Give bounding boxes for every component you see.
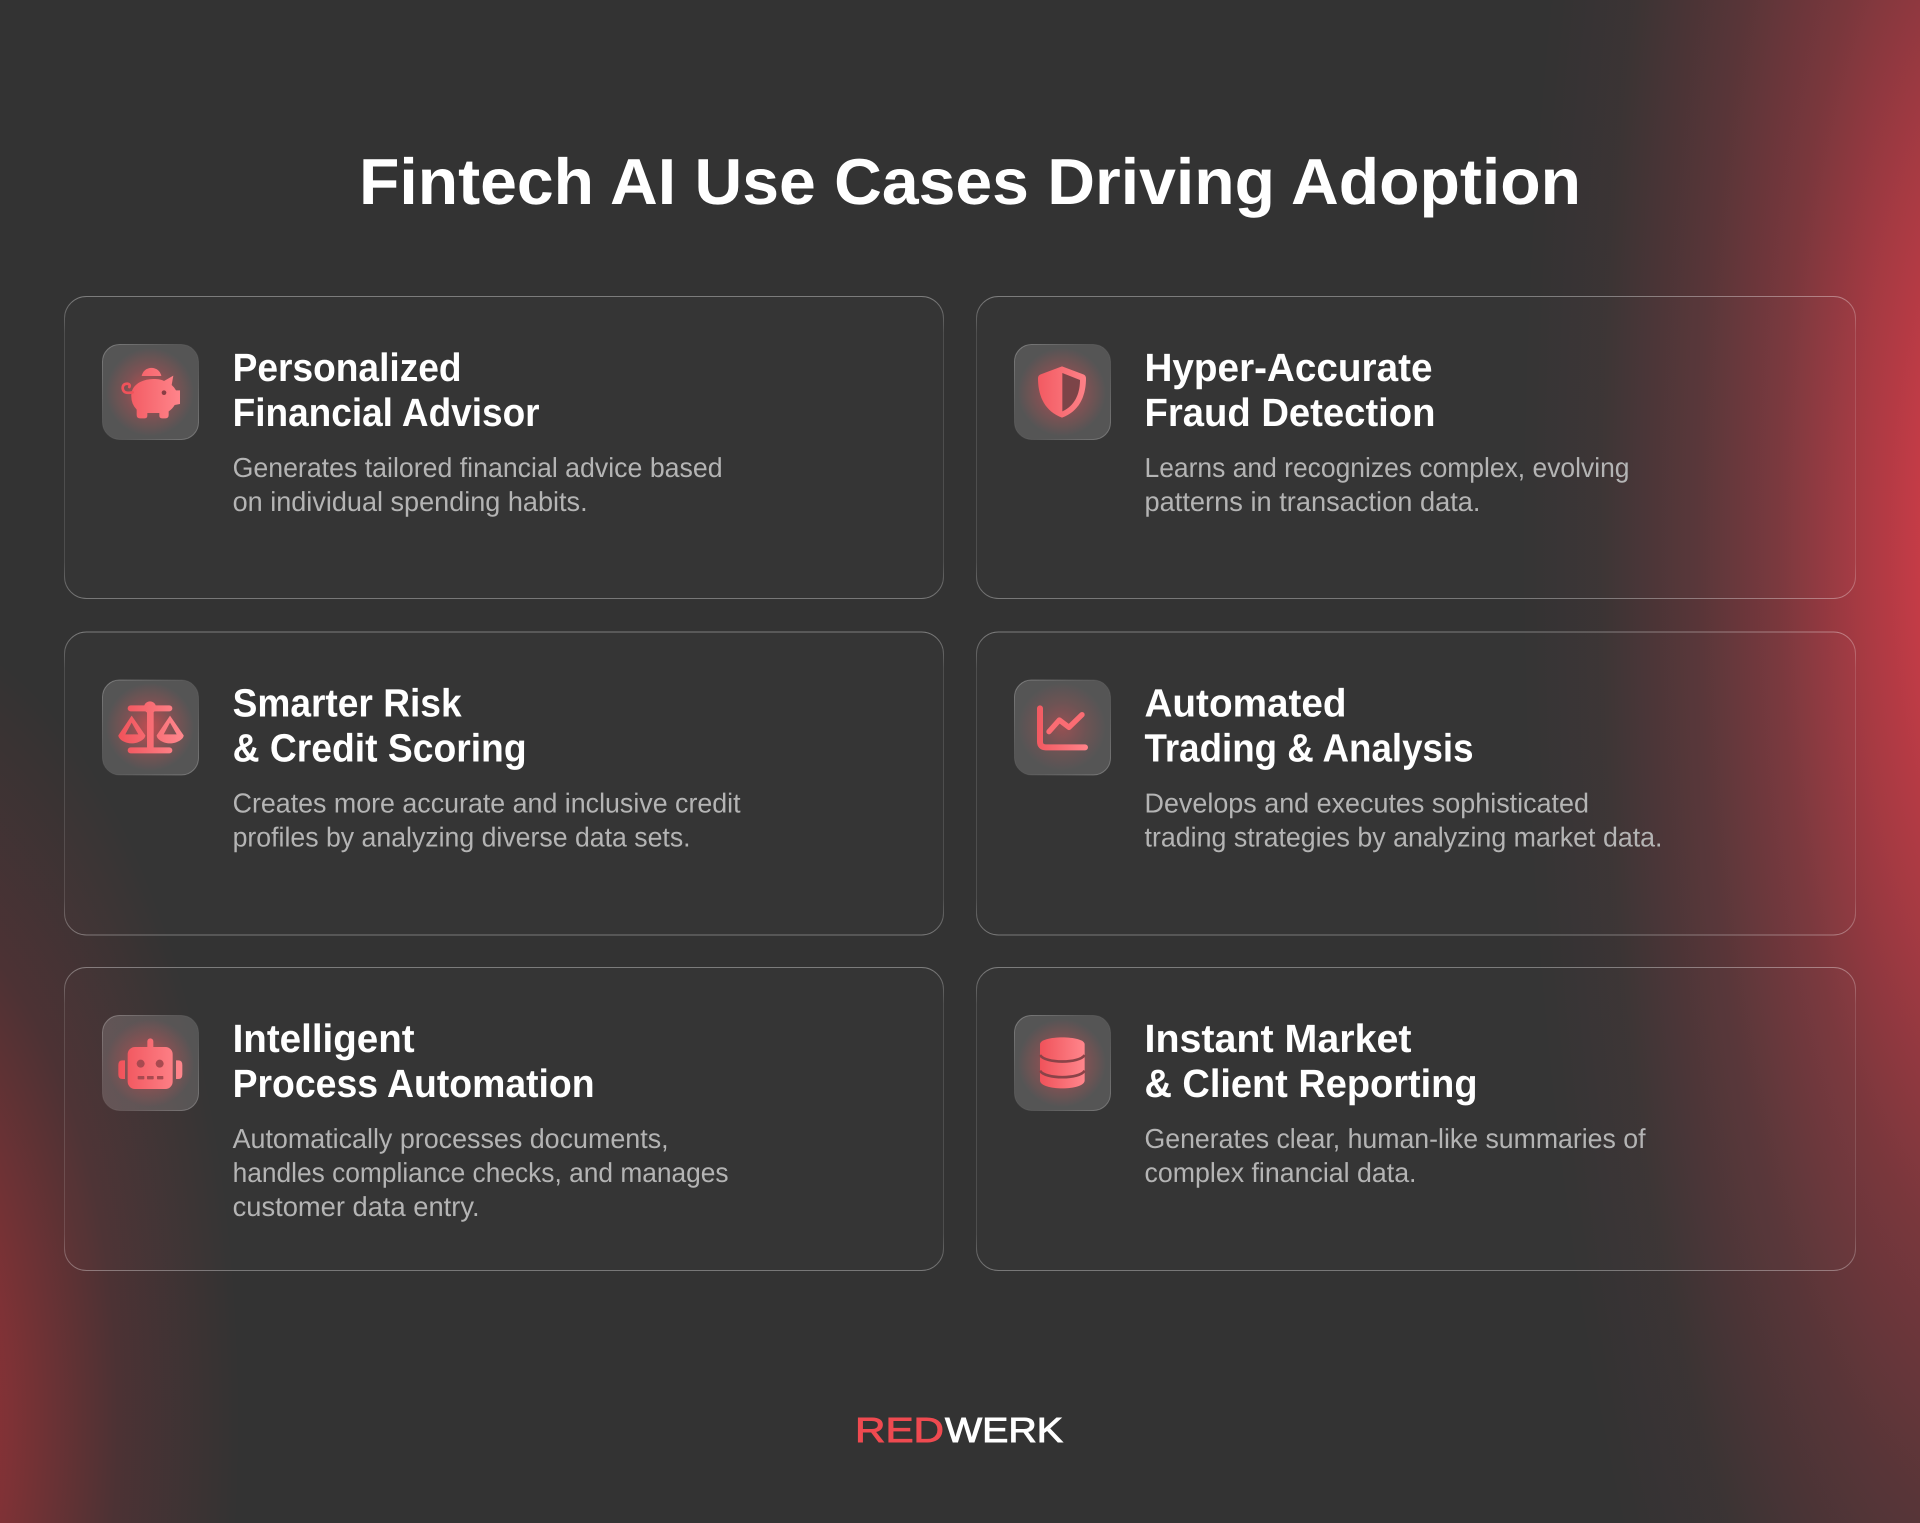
title: Fintech AI Use Cases Driving Adoption (359, 145, 1581, 218)
icon: scales (102, 680, 198, 775)
heading: Automated (1144, 682, 1346, 726)
description: customer data entry. (233, 1191, 480, 1222)
heading (233, 682, 527, 770)
description (1144, 452, 1630, 517)
description: on individual spending habits. (233, 486, 588, 517)
panel: Intelligent Process Automation (64, 968, 944, 1270)
heading (1144, 1017, 1478, 1106)
heading: Trading & Analysis (1144, 726, 1474, 770)
description (233, 452, 723, 517)
description (233, 1123, 729, 1222)
heading: Intelligent (233, 1017, 415, 1061)
description: trading strategies by analyzing market data. (1144, 822, 1662, 852)
panel: Smarter Risk & Credit Scoring (64, 632, 944, 935)
icon: shield (1014, 344, 1110, 440)
description: handles compliance checks, and manages (233, 1157, 729, 1188)
icon: line chart (1014, 680, 1110, 775)
icon: robot (102, 1016, 198, 1110)
heading (233, 346, 540, 435)
description: profiles by analyzing diverse data sets. (233, 822, 691, 852)
icon: database (1014, 1016, 1110, 1110)
panel: Automated Trading & Analysis (976, 632, 1856, 935)
logo: Redwerk: RED (855, 1411, 944, 1450)
description: Develops and executes sophisticated (1144, 788, 1589, 818)
icon: piggy bank (102, 344, 198, 440)
description: complex financial data. (1144, 1157, 1416, 1188)
logo: Redwerk: WERK (945, 1411, 1063, 1450)
description (1144, 1123, 1646, 1188)
heading (233, 1017, 595, 1106)
description: patterns in transaction data. (1144, 486, 1480, 517)
heading: Personalized (233, 346, 462, 390)
description (233, 788, 741, 852)
heading: & Credit Scoring (233, 726, 527, 770)
panel: Personalized Financial Advisor (64, 296, 944, 598)
heading: Financial Advisor (233, 391, 540, 435)
heading: Smarter Risk (233, 682, 462, 726)
description: Creates more accurate and inclusive credit (233, 788, 741, 818)
heading: Fraud Detection (1144, 391, 1436, 435)
description: Generates tailored financial advice based (233, 452, 723, 483)
logo: Redwerk (855, 1411, 1063, 1450)
heading (1144, 346, 1436, 435)
heading: & Client Reporting (1144, 1062, 1478, 1106)
description (1144, 788, 1662, 852)
heading: Instant Market (1144, 1017, 1412, 1061)
description: Learns and recognizes complex, evolving (1144, 452, 1630, 483)
panel: Instant Market & Client Reporting (976, 968, 1856, 1270)
heading (1144, 682, 1474, 770)
description: Automatically processes documents, (233, 1123, 669, 1154)
heading: Process Automation (233, 1062, 595, 1106)
panel: Hyper-Accurate Fraud Detection (976, 296, 1856, 598)
description: Generates clear, human-like summaries of (1144, 1123, 1646, 1154)
heading: Hyper-Accurate (1144, 346, 1432, 390)
